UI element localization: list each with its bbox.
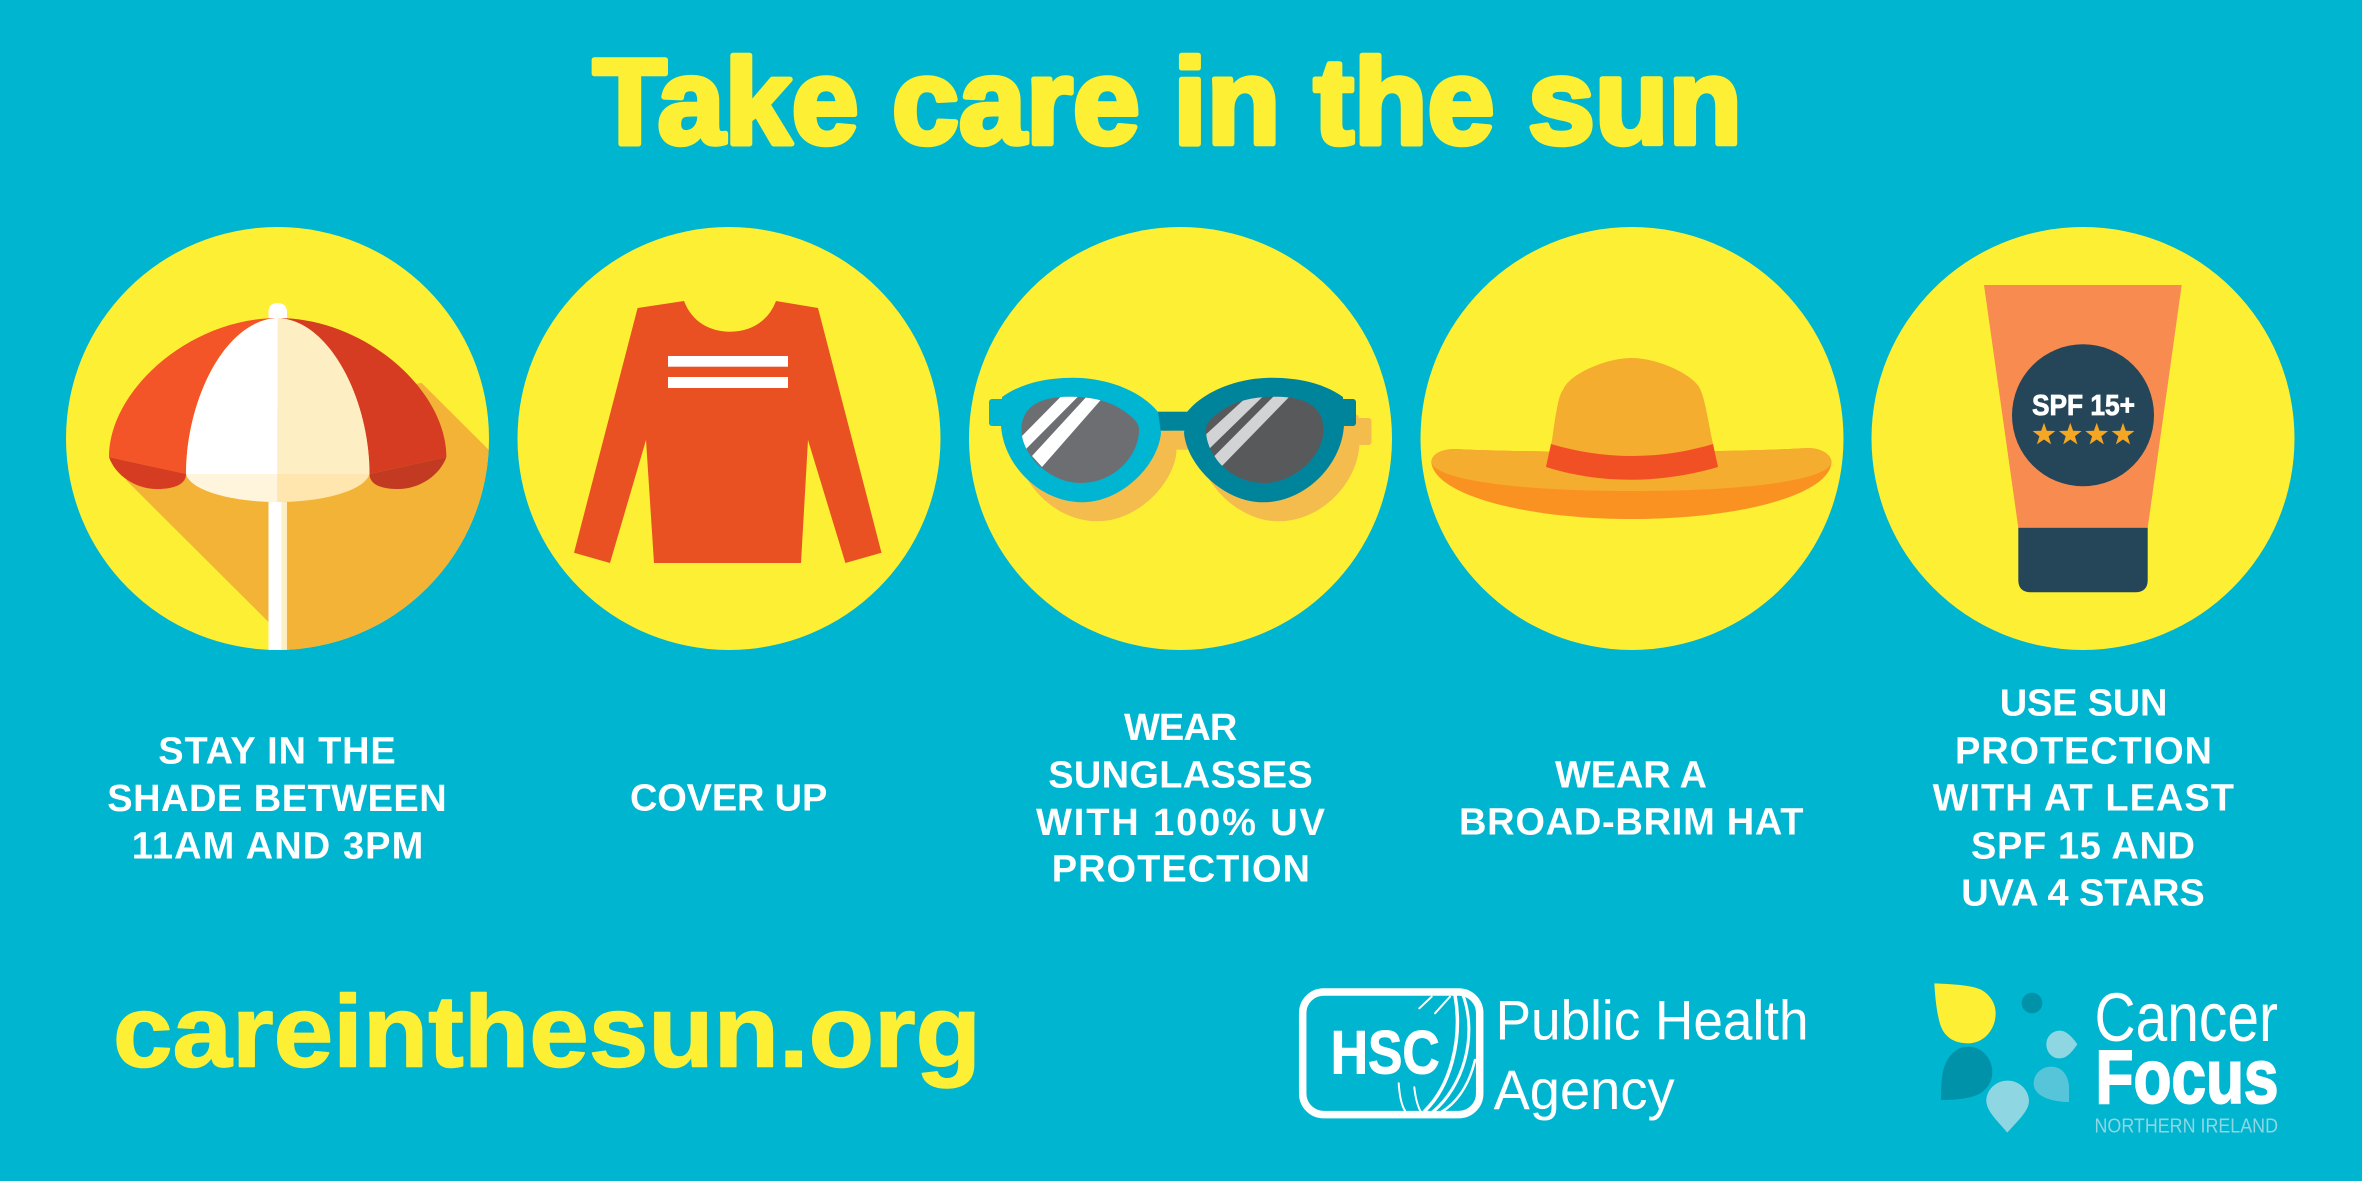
icon: sunscreen tube: [1872, 227, 2294, 650]
title: Take care in the sun: [593, 34, 1742, 170]
panel: cover up: [518, 227, 940, 820]
charity name: [2094, 979, 2278, 1137]
label: wear sunglasses: SUNGLASSES: [1048, 754, 1313, 796]
label: stay in the shade: SHADE BETWEEN: [107, 778, 447, 820]
charity name: Cancer: [2094, 979, 2278, 1056]
charity name: Focus: [2096, 1035, 2278, 1120]
panel: wear sunglasses: [969, 227, 1392, 891]
logo: HSC Public Health Agency: [1303, 988, 1809, 1121]
icon: broad-brim hat: [1420, 227, 1844, 650]
icon: beach umbrella: [66, 227, 489, 650]
icon: long sleeve top: [518, 227, 940, 650]
label: use sun protection: UVA 4 STARS: [1961, 873, 2205, 915]
panel: wear a hat: [1420, 227, 1844, 843]
label: use sun protection: [1933, 683, 2234, 915]
label: use sun protection: PROTECTION: [1955, 730, 2212, 772]
HSC badge: [1303, 992, 1480, 1115]
label: stay in the shade: [107, 730, 447, 867]
label: wear a hat: [1459, 754, 1804, 843]
HSC badge: HSC: [1331, 1018, 1440, 1086]
label: wear sunglasses: [1036, 707, 1326, 891]
agency name: Public Health: [1496, 988, 1809, 1051]
website address: careinthesun.org: [113, 974, 981, 1088]
UVA stars: [2033, 423, 2134, 444]
logo drops: [1934, 983, 2077, 1133]
logo: Cancer Focus Northern Ireland: [1934, 979, 2278, 1137]
icon: sunglasses: [969, 227, 1392, 650]
label: wear sunglasses: WITH 100% UV: [1036, 802, 1326, 844]
label: stay in the shade: STAY IN THE: [158, 730, 396, 772]
panel: use sun protection: [1872, 227, 2294, 915]
label: wear a hat: WEAR A: [1555, 754, 1707, 796]
label: cover up: COVER UP: [630, 778, 827, 820]
label: wear a hat: BROAD-BRIM HAT: [1459, 801, 1804, 843]
charity name: NORTHERN IRELAND: [2094, 1115, 2278, 1137]
agency name: [1494, 988, 1809, 1121]
label: wear sunglasses: PROTECTION: [1052, 849, 1310, 891]
panel: stay in the shade: [66, 227, 600, 867]
label: stay in the shade: 11AM AND 3PM: [132, 825, 423, 867]
label: use sun protection: USE SUN: [2000, 683, 2167, 725]
agency name: Agency: [1494, 1058, 1675, 1121]
label: use sun protection: WITH AT LEAST: [1933, 778, 2234, 820]
label: wear sunglasses: WEAR: [1124, 707, 1237, 749]
SPF label: SPF 15+: [2032, 390, 2135, 422]
label: use sun protection: SPF 15 AND: [1971, 825, 2195, 867]
